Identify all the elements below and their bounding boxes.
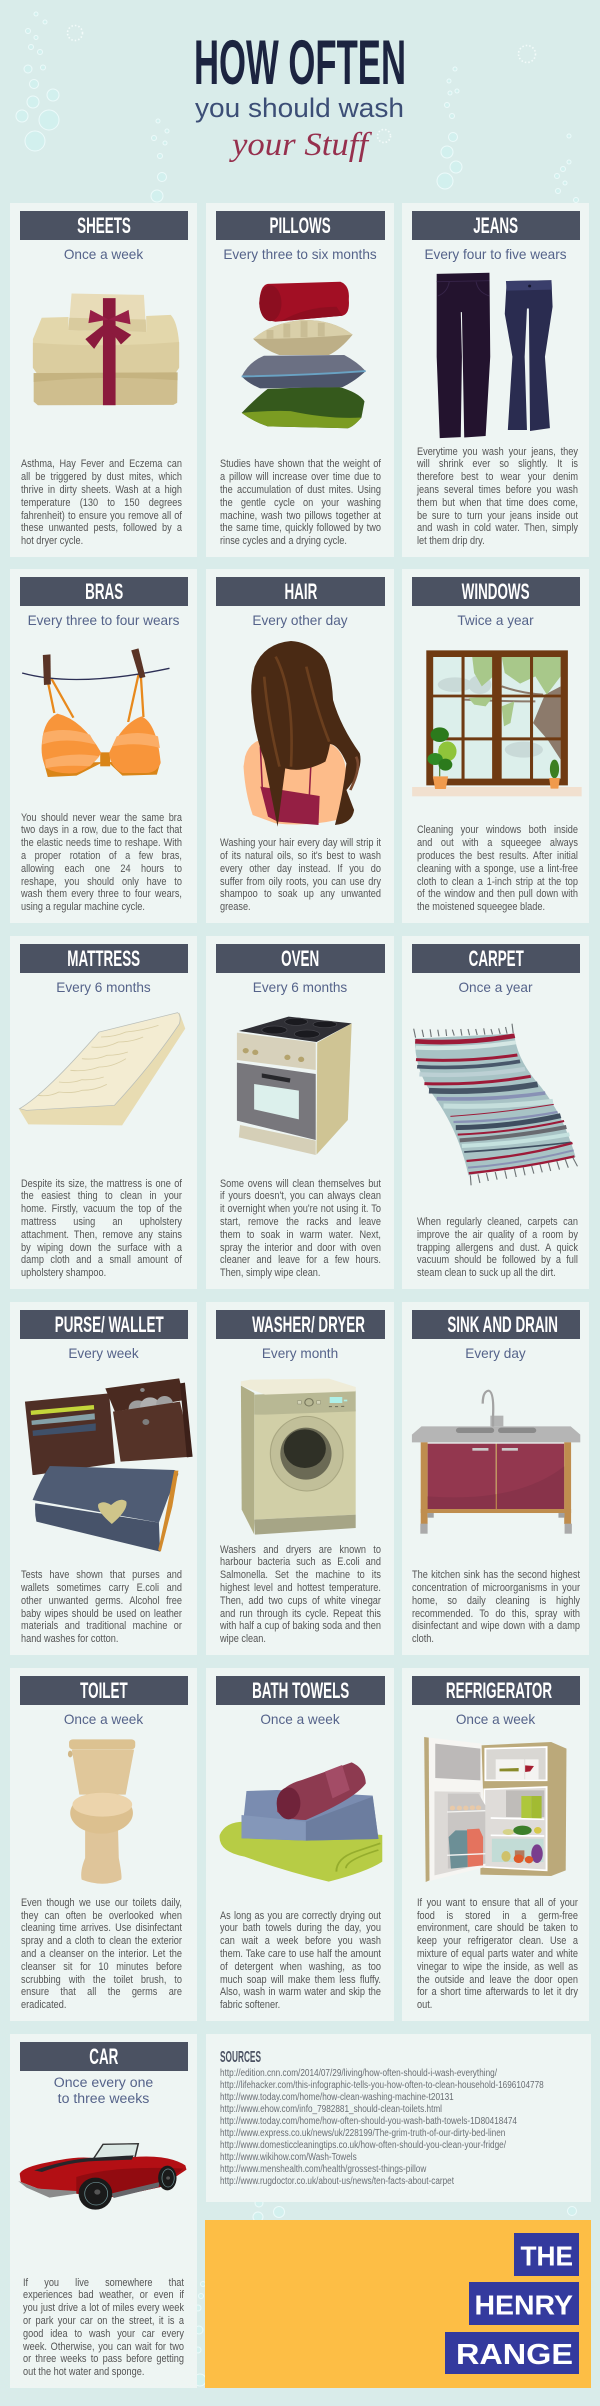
- description: sheets: all be triggered by dust mites, which: [21, 471, 182, 483]
- description: washer and dryer: wipe clean.: [220, 1633, 266, 1645]
- panel: jeans: [402, 203, 589, 557]
- heading: mattress: MATTRESS: [68, 946, 140, 971]
- description: carpet: vacuum should be followed by a full: [417, 1254, 578, 1266]
- description: washer and dryer: [220, 1544, 381, 1645]
- description: washer and dryer: harbour bacteria such as E.coli and: [220, 1556, 381, 1568]
- description: sheets: thrive in dirty sheets. Wash at a high: [21, 484, 182, 496]
- heading: car: CAR: [89, 2044, 119, 2069]
- heading: bras: BRAS: [85, 579, 123, 604]
- description: bath towels: Also, wash in warm water and skip the: [220, 1986, 381, 1998]
- icon: red convertible car: [18, 2143, 186, 2210]
- description: hair: Washing your hair every day will strip it: [220, 837, 381, 849]
- description: washer and dryer: and run through its cycle. Repeat this: [220, 1608, 381, 1620]
- title: you should wash: [195, 93, 404, 123]
- description: oven: Then, simply wipe clean.: [220, 1267, 320, 1279]
- description: windows: cloth to clean a 1-inch strip at the top: [417, 876, 578, 888]
- description: hair: every other day instead. If you do: [220, 863, 381, 875]
- list of source links: http://edition.cnn.com/2014/07/29/living/how-often-should-i-wash-everything/: [220, 2068, 497, 2079]
- description: mattress: mattress using an upholstery: [21, 1216, 182, 1228]
- description: purse and wallet: baby wipes should be used on leather: [21, 1608, 182, 1620]
- heading: sink and drain: [412, 1310, 580, 1339]
- logo word: RANGE: RANGE: [456, 2339, 573, 2371]
- list of source links: http://www.ehow.com/info_7982881_should-clean-toilets.html: [220, 2104, 442, 2115]
- heading: pillows: PILLOWS: [270, 213, 331, 238]
- logo word: RANGE: [445, 2332, 579, 2374]
- description: mattress: upholstery shampoo.: [21, 1267, 107, 1279]
- heading: jeans: JEANS: [474, 213, 518, 238]
- heading: car: [20, 2042, 188, 2071]
- frequency: toilet: Once a week: [64, 1712, 143, 1727]
- icon: wallet and purse: [24, 1378, 193, 1552]
- heading: hair: [216, 577, 385, 606]
- description: carpet: When regularly cleaned, carpets can: [417, 1216, 578, 1228]
- description: refrigerator: food is stored in a germ-free: [417, 1910, 578, 1922]
- description: windows: [417, 824, 578, 913]
- frequency: pillows: Every three to six months: [223, 247, 377, 262]
- description: refrigerator: for a short time afterwards to let it dry: [417, 1986, 578, 1998]
- description: car: or park your car on the street, it is a: [23, 2315, 184, 2327]
- frequency: car: to three weeks: [58, 2090, 149, 2106]
- list of source links: http://www.rugdoctor.co.uk/about-us/news/ten-facts-about-carpet: [220, 2176, 454, 2187]
- list of source links: http://www.today.com/home/how-often-should-you-wash-bath-towels-1D80418474: [220, 2116, 517, 2127]
- description: mattress: [21, 1178, 182, 1279]
- icon: oven: [236, 1016, 352, 1155]
- description: oven: them to soak in warm water. Next,: [220, 1229, 381, 1241]
- description: oven: start, remove the racks and leave: [220, 1216, 381, 1228]
- description: windows: the moistened squeegee blade.: [417, 901, 545, 913]
- list of source links: [220, 2068, 544, 2187]
- description: bras: the elastic needs time to reshape. With: [21, 837, 182, 849]
- heading: refrigerator: REFRIGERATOR: [446, 1678, 552, 1703]
- description: mattress: by wiping down the surface with a: [21, 1242, 182, 1254]
- panel: car: [10, 2034, 197, 2388]
- heading: bras: [20, 577, 188, 606]
- frequency: bath towels: Once a week: [260, 1712, 340, 1727]
- description: oven: Some ovens will clean themselves but: [220, 1178, 381, 1190]
- description: hair: suffer from oily roots, you can use dry: [220, 876, 381, 888]
- description: hair: [220, 837, 381, 913]
- heading: washer and dryer: [216, 1310, 385, 1339]
- icon: bra on washing line: [22, 648, 170, 777]
- frequency: car: Once every one: [54, 2074, 153, 2090]
- description: windows: cleaning with a sponge, use a lint-free: [417, 863, 578, 875]
- frequency: mattress: Every 6 months: [56, 980, 151, 995]
- description: bras: You should never wear the same bra: [21, 812, 182, 824]
- description: toilet: cleaning time arrives. Use disinfectant: [21, 1922, 182, 1934]
- description: car: or three weeks to pass before getting: [23, 2353, 184, 2365]
- description: pillows: the same time, quickly followed by two: [220, 522, 381, 534]
- panel: refrigerator: [402, 1668, 589, 2021]
- description: oven: if yours doesn't, you can always clean: [220, 1190, 381, 1202]
- icon: kitchen sink: [412, 1390, 580, 1534]
- description: purse and wallet: materials and traditional machine or: [21, 1620, 182, 1632]
- description: carpet: improve the air quality of a room by: [417, 1229, 578, 1241]
- description: sheets: temperature (130 to 150 degrees: [21, 497, 182, 509]
- description: sheets: these unwanted pests, followed by a: [21, 522, 182, 534]
- description: bras: [21, 812, 182, 913]
- description: mattress: damp cloth and a small amount of: [21, 1254, 182, 1266]
- description: pillows: Studies have shown that the weight of: [220, 458, 381, 470]
- heading: pillows: [216, 211, 385, 240]
- description: oven: it overnight when you're not using it. To: [220, 1203, 381, 1215]
- icon: striped carpet: [413, 1024, 578, 1186]
- description: car: experiences bad weather, or even if: [23, 2289, 184, 2301]
- description: jeans: [416, 446, 578, 547]
- panel: bras: [10, 569, 197, 923]
- heading: sink and drain: SINK AND DRAIN: [447, 1312, 558, 1337]
- description: jeans: will shrink ever so slightly. It is: [417, 458, 578, 470]
- icon: pillow stack: [242, 282, 366, 428]
- heading: purse and wallet: [20, 1310, 188, 1339]
- panel: sheets: [10, 203, 197, 557]
- icon: folded sheets with ribbon: [32, 294, 180, 406]
- list of source links: http://www.express.co.uk/news/uk/228199/The-grim-truth-of-our-dirty-bed-linen: [220, 2128, 505, 2139]
- heading: sheets: SHEETS: [77, 213, 131, 238]
- panel: sink and drain: [402, 1302, 589, 1655]
- description: sheets: [21, 458, 182, 547]
- heading: purse and wallet: PURSE/ WALLET: [55, 1312, 164, 1337]
- icon: two pairs of jeans: [436, 272, 553, 438]
- description: jeans: Everytime you wash your jeans, they: [417, 446, 578, 458]
- description: pillows: machine, wash two pillows together at: [220, 510, 381, 522]
- heading: sheets: [20, 211, 188, 240]
- description: jeans: them but when that time does come,: [417, 497, 578, 509]
- description: refrigerator: If you want to ensure that all of your: [417, 1897, 578, 1909]
- description: bath towels: much soap will make them less fluffy.: [220, 1974, 381, 1986]
- description: bras: a proper rotation of a few bras,: [21, 850, 182, 862]
- description: windows: Cleaning your windows both inside: [417, 824, 578, 836]
- description: toilet: [21, 1897, 182, 2011]
- description: purse and wallet: hand washes for cotton.: [21, 1633, 119, 1645]
- description: pillows: the accumulation of dust mites. Using: [220, 484, 381, 496]
- panel: pillows: [206, 203, 394, 557]
- description: washer and dryer: Washers and dryers are known to: [220, 1544, 381, 1556]
- heading: carpet: CARPET: [468, 946, 524, 971]
- description: car: [23, 2277, 184, 2378]
- description: refrigerator: environment, care should be taken to: [417, 1922, 578, 1934]
- description: sink and drain: cloth.: [412, 1633, 434, 1645]
- description: toilet: spray and a cloth to clean the exterior: [21, 1935, 182, 1947]
- description: jeans: therefore best to wear your denim: [417, 471, 578, 483]
- heading: refrigerator: [412, 1676, 580, 1705]
- description: sheets: fahrenheit) to ensure you remove all of: [21, 510, 182, 522]
- frequency: car: [54, 2074, 153, 2106]
- description: toilet: and a cleanser on the interior. Let the: [21, 1948, 182, 1960]
- description: purse and wallet: wallets sometimes carry E.coli and: [21, 1582, 182, 1594]
- description: windows: produces the best results. After initial: [417, 850, 578, 862]
- description: refrigerator: the outside and leave the door open: [417, 1974, 578, 1986]
- frequency: refrigerator: Once a week: [456, 1712, 535, 1727]
- heading: sources: SOURCES: [220, 2049, 261, 2066]
- description: toilet: Even though we use our toilets daily,: [21, 1897, 182, 1909]
- frequency: hair: Every other day: [252, 613, 348, 628]
- panel: sources: [206, 2034, 591, 2202]
- icon: washing machine: [240, 1378, 356, 1535]
- description: bath towels: fabric softener.: [220, 1999, 280, 2011]
- description: washer and dryer: with half a cup of baking soda and then: [220, 1620, 381, 1632]
- description: bath towels: As long as you are correctly drying out: [220, 1910, 381, 1922]
- description: bras: using a regular machine cycle.: [21, 901, 145, 913]
- frequency: sheets: Once a week: [64, 247, 143, 262]
- description: bras: reshape, you should only have to: [21, 876, 182, 888]
- frequency: bras: Every three to four wears: [28, 613, 179, 628]
- heading: washer and dryer: WASHER/ DRYER: [252, 1312, 365, 1337]
- title: your Stuff: [229, 127, 372, 163]
- description: car: out the hot water and sponge.: [23, 2366, 144, 2378]
- frequency: carpet: Once a year: [458, 980, 533, 995]
- description: bras: two days in a row, due to the fact that: [21, 824, 182, 836]
- frequency: oven: Every 6 months: [253, 980, 347, 995]
- frequency: jeans: Every four to five wears: [424, 247, 567, 262]
- frequency: purse and wallet: Every week: [68, 1346, 139, 1361]
- icon: toilet: [68, 1739, 136, 1884]
- description: pillows: [220, 458, 381, 547]
- logo word: HENRY: HENRY: [474, 2290, 573, 2320]
- panel: brand logo: [205, 2220, 591, 2388]
- list of source links: http://www.wikihow.com/Wash-Towels: [220, 2152, 357, 2163]
- description: hair: of its natural oils, so it's best to wash: [220, 850, 381, 862]
- description: bath towels: of detergent when washing, as too: [220, 1961, 381, 1973]
- description: sheets: Asthma, Hay Fever and Eczema can: [21, 458, 182, 470]
- description: car: week. Otherwise, you can wait for two: [23, 2341, 184, 2353]
- description: mattress: Despite its size, the mattress is one of: [21, 1178, 182, 1190]
- description: toilet: eradicated.: [21, 1999, 67, 2011]
- frequency: washer and dryer: Every month: [262, 1346, 338, 1361]
- heading: toilet: TOILET: [80, 1678, 128, 1703]
- panel: purse and wallet: [10, 1302, 197, 1655]
- panel: carpet: [402, 936, 589, 1289]
- panel: bath towels: [206, 1668, 394, 2021]
- panel: toilet: [10, 1668, 197, 2021]
- description: car: you just drive a lot of miles every week: [23, 2302, 184, 2314]
- description: car: good idea to wash your car every: [23, 2328, 184, 2340]
- description: jeans: be sure to turn your jeans inside out: [417, 510, 578, 522]
- description: windows: of the window and then pull down with: [417, 888, 578, 900]
- heading: windows: WINDOWS: [462, 579, 530, 604]
- heading: jeans: [412, 211, 580, 240]
- description: pillows: the gentle cycle on your washing: [220, 497, 381, 509]
- panel: oven: [206, 936, 394, 1289]
- description: purse and wallet: Tests have shown that purses and: [21, 1569, 182, 1581]
- description: bath towels: [220, 1910, 381, 2011]
- description: hair: shampoo to soak up any unwanted: [220, 888, 381, 900]
- panel: washer and dryer: [206, 1302, 394, 1655]
- icon: window with plants: [412, 650, 582, 796]
- description: purse and wallet: other unwanted germs. Alcohol free: [21, 1595, 182, 1607]
- description: oven: [220, 1178, 381, 1279]
- logo word: THE: [514, 2233, 579, 2276]
- icon: folded and rolled towels: [220, 1762, 382, 1882]
- description: refrigerator: out.: [417, 1999, 432, 2011]
- description: sink and drain: home, so daily cleaning is highly: [412, 1595, 580, 1607]
- description: refrigerator: mixture of equal parts water and white: [417, 1948, 578, 1960]
- description: carpet: [417, 1216, 578, 1279]
- list of source links: http://www.domesticcleaningtips.co.uk/how-often-should-you-clean-your-fridge/: [220, 2140, 506, 2151]
- list of source links: http://www.today.com/home/how-clean-washing-machine-t20131: [220, 2092, 454, 2103]
- description: sink and drain: recommended. To do this, spray with: [412, 1608, 580, 1620]
- list of source links: http://www.menshealth.com/health/grossest-things-pillow: [220, 2164, 427, 2175]
- description: bath towels: can wait a week before you wash: [220, 1935, 381, 1947]
- icon: open refrigerator: [424, 1737, 566, 1882]
- heading: hair: HAIR: [284, 579, 317, 604]
- description: oven: spray the interior and door with oven: [220, 1242, 381, 1254]
- description: windows: and out with a squeegee always: [417, 837, 578, 849]
- description: sheets: hot dryer cycle.: [21, 535, 84, 547]
- description: pillows: rinse cycles and a drying cycle.: [220, 535, 347, 547]
- logo word: HENRY: [469, 2282, 579, 2325]
- description: washer and dryer: Salmonella. Set the machine to its: [220, 1569, 381, 1581]
- description: toilet: scrubbing with the toilet brush, to: [21, 1974, 182, 1986]
- description: toilet: ensure that all the germs are: [21, 1986, 182, 1998]
- description: oven: cleaner and leave for a few hours.: [220, 1254, 381, 1266]
- description: bras: wash them every three to four wears,: [21, 888, 182, 900]
- heading: oven: [216, 944, 385, 973]
- description: carpet: trapping allergens and dust. A quick: [417, 1242, 578, 1254]
- heading: carpet: [412, 944, 580, 973]
- logo word: THE: THE: [520, 2240, 573, 2272]
- description: refrigerator: [417, 1897, 578, 2011]
- description: sink and drain: [412, 1569, 580, 1645]
- description: jeans: jeans several times before you wash: [417, 484, 578, 496]
- description: purse and wallet: [21, 1569, 182, 1645]
- description: washer and dryer: highest level and hottest temperature.: [220, 1582, 381, 1594]
- description: bath towels: your bath towels during the day, you: [220, 1922, 381, 1934]
- description: hair: grease.: [220, 901, 251, 913]
- description: refrigerator: keep your refrigerator clean. Use a: [417, 1935, 578, 1947]
- heading: bath towels: BATH TOWELS: [252, 1678, 349, 1703]
- icon: mattress: [18, 1012, 186, 1126]
- description: mattress: attachment. Then, remove any stains: [21, 1229, 182, 1241]
- frequency: windows: Twice a year: [457, 613, 534, 628]
- heading: bath towels: [216, 1676, 385, 1705]
- description: mattress: home. Firstly, vacuum the top of the: [21, 1203, 182, 1215]
- description: toilet: they can often be overlooked when: [21, 1910, 182, 1922]
- heading: windows: [412, 577, 580, 606]
- description: mattress: the easiest thing to clean in your: [21, 1190, 182, 1202]
- description: sink and drain: The kitchen sink has the second highest: [412, 1569, 580, 1581]
- description: bath towels: them. Take care to use half the amount: [220, 1948, 381, 1960]
- description: carpet: steam clean to suck up all the dirt.: [417, 1267, 556, 1279]
- panel: mattress: [10, 936, 197, 1289]
- panel: windows: [402, 569, 589, 923]
- description: refrigerator: vinegar to wipe the inside, as well as: [417, 1961, 578, 1973]
- heading: oven: OVEN: [281, 946, 320, 971]
- icon: woman with long hair from behind: [244, 641, 360, 827]
- description: washer and dryer: Then, add two cups of white vinegar: [220, 1595, 381, 1607]
- description: toilet: cleanser sit for 10 minutes before: [21, 1961, 182, 1973]
- description: bras: allowing each one 24 hours to: [21, 863, 182, 875]
- heading: toilet: [20, 1676, 188, 1705]
- description: jeans: let them drip dry.: [417, 535, 485, 547]
- frequency: sink and drain: Every day: [465, 1346, 526, 1361]
- description: sink and drain: disinfectant and wipe down with a damp: [412, 1620, 580, 1632]
- description: pillows: a pillow will increase over time due to: [220, 471, 381, 483]
- description: sink and drain: concentration of microorganisms in your: [412, 1582, 580, 1594]
- description: jeans: and wash in cold water. Then, simply: [417, 522, 578, 534]
- heading: mattress: [20, 944, 188, 973]
- title: [194, 30, 406, 163]
- description: car: If you live somewhere that: [23, 2277, 184, 2289]
- panel: hair: [206, 569, 394, 923]
